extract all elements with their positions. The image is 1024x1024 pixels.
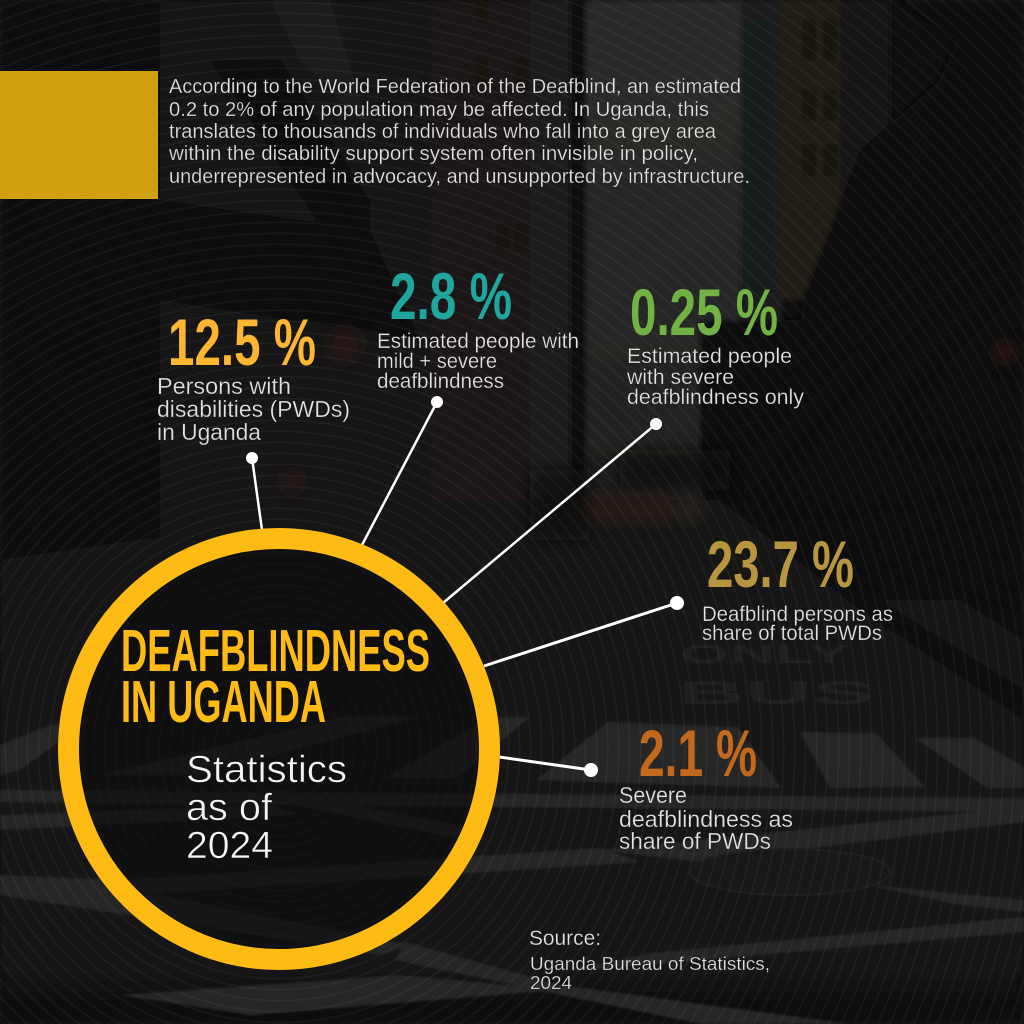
subtitle: 2024 bbox=[186, 825, 273, 867]
central circle with ring bbox=[68, 538, 490, 960]
stat: 0.25 percent bbox=[626, 275, 804, 409]
source bbox=[529, 927, 775, 993]
stat: 12.5 percent: in Uganda bbox=[157, 419, 262, 445]
intro paragraph: According to the World Federation of the Deafblind, an estimated bbox=[169, 75, 741, 98]
source: 2024 bbox=[530, 972, 572, 993]
stat: 0.25 percent: 0.25 % bbox=[630, 275, 778, 349]
stat: 2.8 percent: Estimated people with bbox=[377, 330, 579, 353]
stat: 2.1 percent bbox=[619, 716, 800, 854]
stat: 2.1 percent: Severe bbox=[619, 782, 687, 808]
stat: 2.8 percent: 2.8 % bbox=[390, 259, 512, 333]
stat: 2.1 percent: share of PWDs bbox=[619, 828, 771, 854]
intro paragraph: translates to thousands of individuals who fall into a grey area bbox=[169, 120, 717, 143]
stat: 12.5 percent bbox=[157, 305, 357, 445]
intro paragraph: underrepresented in advocacy, and unsupported by infrastructure. bbox=[169, 165, 750, 188]
subtitle: Statistics bbox=[186, 749, 347, 791]
stat: 2.1 percent: deafblindness as bbox=[619, 806, 793, 832]
intro paragraph: 0.2 to 2% of any population may be affected. In Uganda, this bbox=[169, 98, 709, 121]
title: IN UGANDA bbox=[121, 669, 326, 735]
stat: 23.7 percent: 23.7 % bbox=[707, 527, 854, 601]
connector lines and dots bbox=[246, 396, 684, 777]
yellow accent block bbox=[0, 71, 158, 199]
stat: 12.5 percent: 12.5 % bbox=[168, 305, 316, 379]
stat: 0.25 percent: deafblindness only bbox=[627, 386, 804, 409]
road marking: ONLY BUS: BUS bbox=[678, 675, 874, 711]
source: Source: bbox=[529, 927, 601, 950]
stat: 23.7 percent: Deafblind persons as bbox=[702, 603, 893, 626]
stat: 23.7 percent bbox=[702, 527, 899, 645]
stat: 12.5 percent: Persons with bbox=[157, 373, 291, 399]
road marking: ONLY BUS: ONLY bbox=[680, 639, 850, 669]
subtitle: as of bbox=[186, 787, 272, 829]
title: DEAFBLINDNESS bbox=[121, 618, 430, 684]
stat: 0.25 percent: Estimated people bbox=[627, 345, 792, 368]
stat: 23.7 percent: share of total PWDs bbox=[702, 622, 882, 645]
stat: 2.8 percent bbox=[377, 259, 585, 393]
stat: 2.1 percent: 2.1 % bbox=[639, 716, 757, 790]
source: Uganda Bureau of Statistics, bbox=[530, 953, 770, 974]
building windows bbox=[478, 0, 836, 300]
stat: 2.8 percent: deafblindness bbox=[377, 370, 504, 393]
intro paragraph: within the disability support system often invisible in policy, bbox=[168, 142, 698, 165]
stat: 0.25 percent: with severe bbox=[626, 366, 734, 389]
manhole cover bbox=[690, 849, 890, 895]
stat: 2.8 percent: mild + severe bbox=[377, 350, 497, 373]
road marking: ONLY BUS bbox=[678, 639, 874, 711]
stat: 12.5 percent: disabilities (PWDs) bbox=[157, 396, 350, 422]
